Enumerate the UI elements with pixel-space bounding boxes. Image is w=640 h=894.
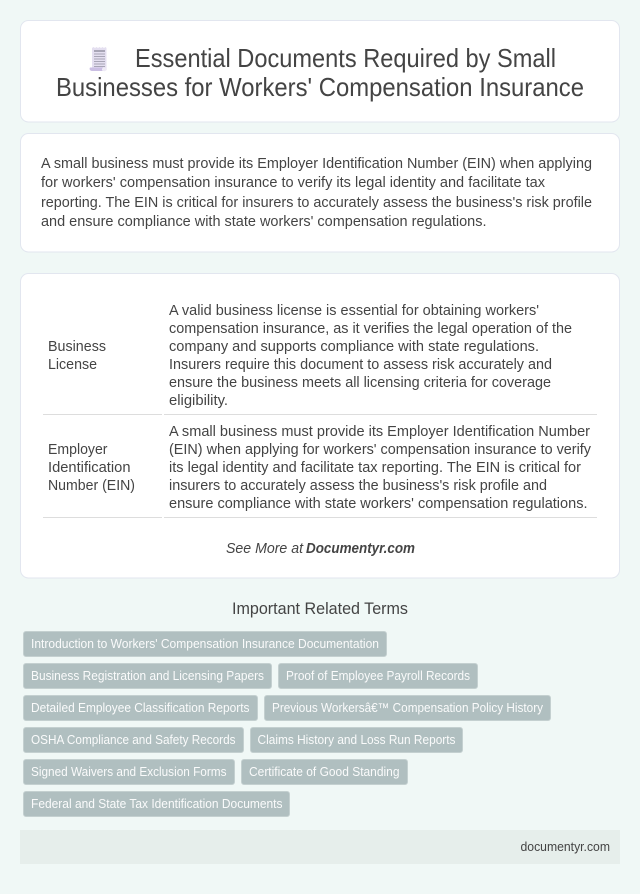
tag: classification reports (24, 696, 258, 720)
panel: related term tags (24, 632, 550, 816)
row text: Employer Identification Number description: (EIN) when applying for workers' compensation insurance to verify (169, 442, 592, 458)
row label: Employer Identification Number: Identification (48, 460, 130, 476)
row text: Business License description (169, 303, 572, 409)
title text: Businesses for Workers' Compensation Insurance (56, 74, 584, 102)
summary text: for workers' compensation insurance to verify its legal identity and facilitate tax (41, 175, 546, 191)
tag: introduction (24, 632, 386, 656)
tag: payroll records (278, 664, 478, 688)
row label: Employer Identification Number: Employer (48, 442, 108, 458)
summary text: A small business must provide its Employer Identification Number (EIN) when applying (41, 156, 592, 172)
tag: policy history: Previous Workersâ€™ Compensation Policy History (272, 701, 544, 715)
tag: policy history (264, 696, 550, 720)
footer bar (20, 830, 620, 864)
row text: Business License description: compensation insurance, as it verifies the legal operation of the (169, 321, 572, 337)
icon: receipt document (90, 47, 107, 71)
see more link: Documentyr.com (306, 541, 415, 557)
summary text: reporting. The EIN is critical for insurers to accurately assess the business's risk profile (41, 195, 592, 211)
heading: related terms: Important Related Terms (232, 600, 408, 618)
row label: Business License: Business (48, 339, 106, 355)
tag: business registration: Business Registration and Licensing Papers (31, 669, 264, 683)
tag: OSHA records (24, 728, 244, 752)
row text: Business License description: Insurers require this document to assess risk accurately and (169, 357, 552, 373)
summary text: and ensure compliance with state workers' compensation regulations. (41, 214, 486, 230)
title text (56, 45, 584, 102)
tag: signed waivers (24, 760, 234, 784)
tag: tax identification: Federal and State Tax Identification Documents (31, 797, 282, 811)
tag: business registration (24, 664, 272, 688)
panel: summary card (20, 134, 620, 252)
row label: Business License: License (48, 357, 97, 373)
row text: Business License description: company and supports compliance with state regulations. (169, 339, 539, 355)
row text: Employer Identification Number description: its legal identity and facilitate tax reporting. The EIN is critical for (169, 460, 581, 476)
tag: claims history: Claims History and Loss Run Reports (258, 733, 456, 747)
title text: Essential Documents Required by Small (135, 45, 556, 73)
tag: OSHA records: OSHA Compliance and Safety Records (31, 733, 236, 747)
tag: tax identification (24, 792, 290, 816)
tag: good standing (242, 760, 408, 784)
see more link (226, 541, 415, 557)
row text: Business License description: A valid business license is essential for obtaining workers' (169, 303, 539, 319)
row text: Business License description: ensure the business meets all licensing criteria for coverage (169, 375, 551, 391)
row text: Employer Identification Number description (169, 424, 592, 512)
tag: good standing: Certificate of Good Standing (249, 765, 400, 779)
row label: Employer Identification Number (48, 442, 135, 494)
tag: claims history (250, 728, 462, 752)
row text: Employer Identification Number description: A small business must provide its Employer Identification Number (169, 424, 590, 440)
footer text: documentyr.com (520, 839, 610, 854)
panel: documents table card (20, 274, 620, 578)
panel: title card (20, 20, 620, 122)
tag: payroll records: Proof of Employee Payroll Records (286, 669, 470, 683)
row text: Employer Identification Number description: ensure compliance with state workers' compensation regulations. (169, 496, 588, 512)
row text: Employer Identification Number description: insurers to accurately assess the business's risk profile and (169, 478, 547, 494)
tag: classification reports: Detailed Employee Classification Reports (31, 701, 250, 715)
summary text (41, 156, 592, 230)
row text: Business License description: eligibility. (169, 393, 228, 409)
row label: Business License (48, 339, 106, 373)
see more link: See More at (226, 541, 304, 557)
tag: introduction: Introduction to Workers' Compensation Insurance Documentation (31, 637, 379, 651)
tag: signed waivers: Signed Waivers and Exclusion Forms (31, 765, 226, 779)
row label: Employer Identification Number: Number (EIN) (48, 478, 135, 494)
